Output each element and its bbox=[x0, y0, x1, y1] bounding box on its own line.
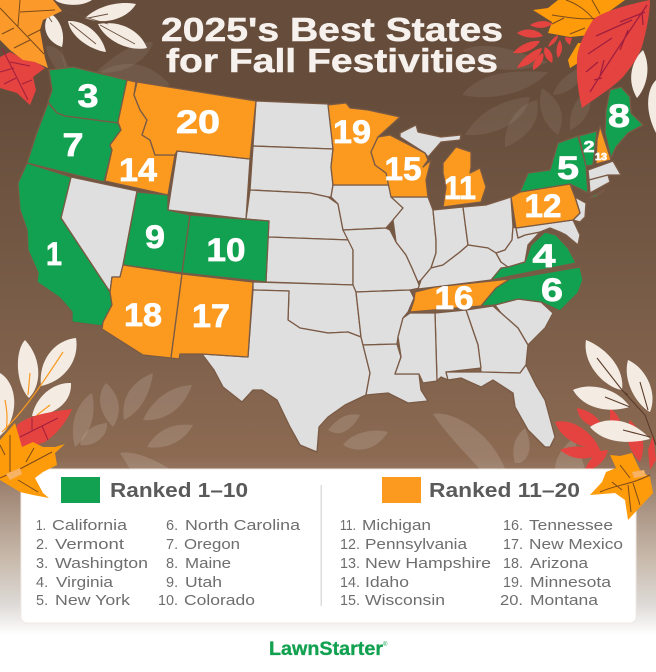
rank numbers on the states: 18 bbox=[124, 297, 162, 333]
state: Missouri bbox=[343, 228, 420, 292]
list: ranks 1-5: Virginia bbox=[56, 575, 114, 591]
state: Vermont bbox=[579, 131, 597, 166]
rank numbers on the states: 12 bbox=[524, 188, 562, 224]
list: ranks 11-15 bbox=[340, 518, 491, 609]
state: Utah bbox=[123, 192, 190, 273]
state: New Hampshire bbox=[596, 126, 611, 164]
list: ranks 6-10: Colorado bbox=[184, 593, 255, 609]
state: Illinois bbox=[391, 197, 436, 282]
icon: orange maple leaf bbox=[533, 0, 625, 37]
state: Connecticut and Rhode Island bbox=[589, 175, 610, 193]
state: Washington bbox=[48, 67, 127, 123]
faded background leaves: bottom bbox=[73, 373, 585, 470]
list: ranks 11-15: 15. bbox=[340, 593, 360, 609]
rank numbers on the states: 19 bbox=[333, 114, 371, 150]
icon: cream leaf veins bbox=[48, 10, 135, 44]
list: ranks 6-10: 6. bbox=[166, 518, 178, 534]
legend: ranked 1-10: Ranked 1–10 bbox=[110, 479, 248, 502]
state: Iowa bbox=[331, 185, 403, 230]
leaf cluster: top left bbox=[0, 0, 147, 105]
state: West Virginia bbox=[496, 227, 540, 267]
icon: red leaf bbox=[15, 409, 72, 450]
list: ranks 1-5: 2. bbox=[36, 537, 48, 553]
state: South Dakota bbox=[250, 146, 333, 197]
rank numbers on the states: 16 bbox=[434, 280, 474, 316]
state: Maryland and Delaware bbox=[516, 220, 580, 245]
state: Wyoming bbox=[168, 151, 250, 219]
state: Nevada bbox=[61, 177, 137, 292]
list: ranks 6-10 bbox=[158, 518, 301, 609]
rank numbers on the states: 13 bbox=[595, 152, 607, 163]
state: Maine bbox=[605, 87, 643, 158]
icon: cream leaves bbox=[573, 340, 653, 442]
icon: large red leaf bbox=[577, 0, 650, 108]
list: ranks 16-20: New Mexico bbox=[529, 537, 623, 553]
state: Kentucky bbox=[418, 245, 508, 289]
list: ranks 1-5: 3. bbox=[36, 556, 48, 572]
title bbox=[161, 11, 503, 79]
state: Wisconsin bbox=[371, 135, 431, 197]
list: ranks 6-10: Oregon bbox=[184, 537, 240, 553]
list: ranks 16-20: Tennessee bbox=[529, 518, 613, 534]
state: Texas bbox=[202, 290, 370, 452]
icon: cream leaves bbox=[631, 50, 656, 133]
state: New York bbox=[520, 136, 605, 198]
list: ranks 16-20 bbox=[500, 518, 623, 609]
state: Michigan lower peninsula bbox=[443, 147, 486, 207]
list: ranks 1-5: 5. bbox=[36, 593, 48, 609]
list: ranks 6-10: Utah bbox=[185, 575, 222, 591]
legend: ranked 11-20 bbox=[382, 477, 580, 503]
state: Indiana bbox=[431, 207, 468, 268]
list: ranks 11-15: 11. bbox=[340, 518, 356, 534]
leaf cluster: bottom left bbox=[0, 338, 77, 450]
list: ranks 1-5: Washington bbox=[55, 556, 148, 572]
state: Oregon bbox=[27, 103, 121, 182]
state: Massachusetts bbox=[588, 161, 621, 180]
list: ranks 1-5: 1. bbox=[36, 518, 46, 534]
state: Minnesota bbox=[328, 103, 400, 185]
state: Arkansas bbox=[356, 290, 414, 345]
list: ranks 6-10: Maine bbox=[185, 556, 231, 572]
state: California bbox=[18, 163, 112, 326]
list: ranks 16-20: Montana bbox=[530, 593, 599, 609]
title: 2025's Best States bbox=[161, 11, 503, 48]
list: ranks 6-10: North Carolina bbox=[185, 518, 301, 534]
state: North Carolina bbox=[481, 267, 583, 311]
icon: cream leaves bbox=[0, 338, 77, 436]
state: Arizona bbox=[102, 265, 182, 358]
icon: red sprig bbox=[513, 21, 572, 70]
rank numbers on the states: 8 bbox=[608, 98, 630, 134]
list: ranks 16-20: Arizona bbox=[530, 556, 589, 572]
list: ranks 1-5: 4. bbox=[36, 575, 48, 591]
rank numbers on the states: 15 bbox=[384, 151, 422, 187]
list: ranks 1-5 bbox=[36, 518, 148, 609]
icon: leaf stems bbox=[597, 358, 656, 445]
list: ranks 11-15: Michigan bbox=[362, 518, 431, 534]
rank numbers on the states: 6 bbox=[541, 272, 563, 308]
rank numbers on the states: 4 bbox=[532, 238, 556, 274]
state: North Dakota bbox=[253, 101, 333, 149]
list: ranks 16-20: 20. bbox=[500, 593, 523, 609]
list: ranks 1-5: Vermont bbox=[55, 537, 124, 553]
icon: red maple leaf bbox=[0, 52, 45, 105]
orange maple leaf on top of the panel, left bbox=[0, 423, 65, 498]
rank numbers on the states: 20 bbox=[176, 104, 220, 140]
list: ranks 16-20: 16. bbox=[503, 518, 523, 534]
list: ranks 11-15: Wisconsin bbox=[365, 593, 445, 609]
rank numbers on the states: 9 bbox=[145, 219, 165, 255]
list: ranks 6-10: 8. bbox=[166, 556, 178, 572]
state: Montana bbox=[134, 82, 256, 159]
state: Mississippi bbox=[395, 313, 437, 383]
list: ranks 11-15: 13. bbox=[340, 556, 360, 572]
logo: LawnStarter: LawnStarter bbox=[269, 639, 384, 660]
rank numbers on the states: 3 bbox=[78, 78, 98, 114]
list: ranks 11-15: 14. bbox=[340, 575, 360, 591]
rank numbers on the states: 5 bbox=[557, 150, 579, 186]
faded background leaves: top bbox=[46, 42, 591, 147]
state: New Mexico bbox=[171, 274, 253, 359]
state: Alabama bbox=[435, 310, 481, 381]
rank numbers on the states: 11 bbox=[444, 170, 476, 206]
rank numbers on the states: 7 bbox=[62, 127, 84, 163]
state: Tennessee bbox=[410, 279, 510, 312]
state: Idaho bbox=[105, 80, 175, 195]
rank numbers on the states: 1 bbox=[46, 236, 62, 272]
icon: cream leaves bbox=[45, 0, 147, 52]
list: ranks 16-20: 17. bbox=[503, 537, 523, 553]
list: ranks 11-15: Idaho bbox=[365, 575, 409, 591]
state: Louisiana bbox=[363, 344, 428, 403]
list: ranks 1-5: California bbox=[52, 518, 128, 534]
rank numbers on the states: 17 bbox=[192, 298, 230, 334]
list: ranks 16-20: Minnesota bbox=[530, 575, 612, 591]
list: ranks 6-10: 10. bbox=[158, 593, 178, 609]
legend: ranked 11-20: Ranked 11–20 bbox=[429, 479, 580, 502]
legend panel bbox=[0, 423, 653, 623]
list: ranks 11-15: 12. bbox=[340, 537, 360, 553]
map of the United States bbox=[18, 67, 643, 452]
list: ranks 11-15: New Hampshire bbox=[365, 556, 491, 572]
state: Florida bbox=[446, 365, 555, 447]
rank numbers on the states: 14 bbox=[119, 152, 157, 188]
rank numbers on the states: 10 bbox=[206, 232, 246, 268]
orange maple leaf on top of the panel, right bbox=[590, 453, 653, 520]
logo: LawnStarter: ® bbox=[383, 641, 388, 648]
state: Colorado bbox=[182, 215, 269, 282]
list: ranks 1-5: New York bbox=[55, 593, 131, 609]
state: Oklahoma bbox=[253, 282, 361, 337]
state: Pennsylvania bbox=[511, 184, 580, 228]
icon: orange stems bbox=[2, 352, 63, 432]
state: New Jersey bbox=[573, 197, 586, 222]
title: for Fall Festivities bbox=[166, 42, 498, 79]
state: Virginia bbox=[491, 232, 576, 280]
state: Kansas bbox=[266, 237, 353, 285]
list: ranks 16-20: 18. bbox=[503, 556, 523, 572]
state: Nebraska bbox=[246, 190, 350, 240]
list: ranks 16-20: 19. bbox=[503, 575, 523, 591]
state: South Carolina bbox=[495, 299, 553, 345]
legend: ranked 1-10 bbox=[61, 477, 248, 503]
rank numbers on the states bbox=[46, 78, 630, 334]
leaf cluster: bottom right bbox=[555, 340, 656, 470]
list: ranks 11-15: Pennsylvania bbox=[365, 537, 468, 553]
list: ranks 6-10: 7. bbox=[166, 537, 178, 553]
state: Michigan upper peninsula bbox=[400, 125, 461, 157]
list: ranks 6-10: 9. bbox=[166, 575, 178, 591]
rank numbers on the states: 2 bbox=[584, 139, 595, 156]
leaf cluster: top right bbox=[513, 0, 656, 133]
state: Georgia bbox=[466, 306, 528, 373]
icon: orange maple leaf bbox=[0, 0, 62, 68]
icon: red sprig bbox=[555, 408, 656, 470]
state: Ohio bbox=[463, 197, 513, 253]
